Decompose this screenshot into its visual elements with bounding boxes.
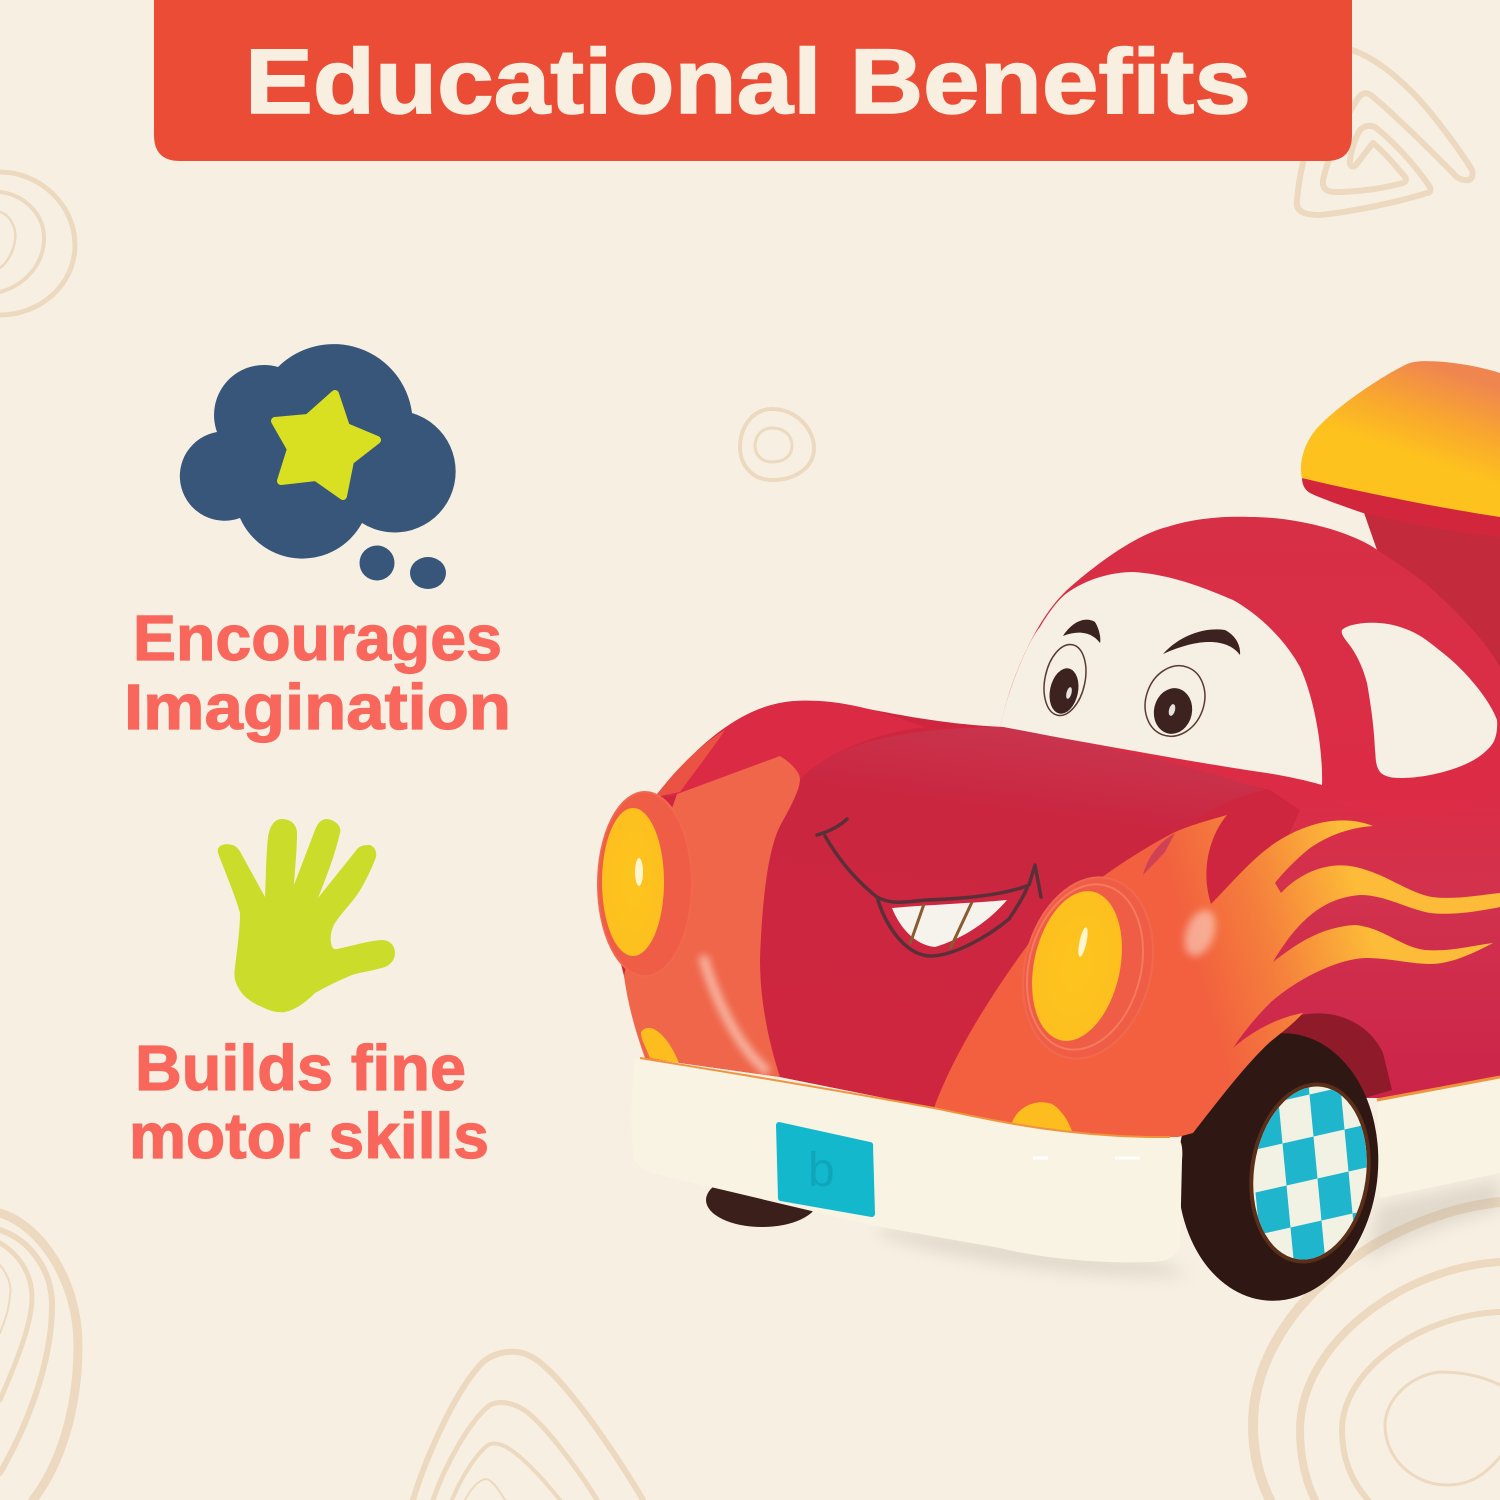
right fender with flames (934, 815, 1500, 1145)
title banner (154, 0, 1352, 161)
bumper top edge (640, 1058, 1170, 1137)
front wheel (706, 1173, 818, 1227)
hood (760, 727, 1265, 1108)
label: builds fine motor skills: Builds fine (135, 1032, 466, 1104)
label: encourages imagination: Imagination (124, 671, 511, 743)
icon: thought cloud with star (180, 344, 456, 589)
license plate (779, 1125, 872, 1214)
label: builds fine motor skills (129, 1032, 489, 1172)
windshield (1000, 572, 1322, 785)
left fender edge (655, 730, 725, 797)
toy race car (598, 361, 1500, 1319)
right eye (1135, 629, 1240, 745)
rear body (1190, 783, 1500, 1100)
fender pocket (660, 701, 925, 796)
license plate: b (808, 1144, 835, 1197)
fender slot (1143, 833, 1175, 875)
right headlight (1005, 863, 1171, 1073)
hub checks (1256, 1088, 1367, 1260)
car front body (600, 701, 1300, 1130)
label: encourages imagination (124, 602, 511, 743)
fender highlight right (1179, 906, 1221, 960)
spoiler support (1363, 510, 1500, 680)
side window (1342, 623, 1497, 778)
label: builds fine motor skills: motor skills (129, 1100, 489, 1172)
label: encourages imagination: Encourages (133, 602, 502, 674)
icon: hand (218, 819, 395, 1012)
fender highlight (703, 956, 768, 1072)
rear bumper top edge (1377, 1077, 1500, 1100)
rear bumper (1377, 1077, 1500, 1198)
smile (817, 819, 1041, 956)
fog lights (641, 1028, 1074, 1140)
spoiler lip (1302, 478, 1500, 537)
rear wheel (1180, 1033, 1378, 1301)
front bumper (632, 1058, 1182, 1262)
spoiler (1301, 361, 1500, 517)
left headlight (598, 792, 692, 976)
cabin (1000, 517, 1500, 900)
title: Educational Benefits (245, 31, 1251, 133)
ground shadow (880, 1178, 1500, 1276)
left eye (1038, 620, 1100, 719)
left fender wedge (624, 756, 800, 1077)
wheel arch (1270, 1013, 1392, 1105)
bumper glints (1033, 1156, 1140, 1160)
